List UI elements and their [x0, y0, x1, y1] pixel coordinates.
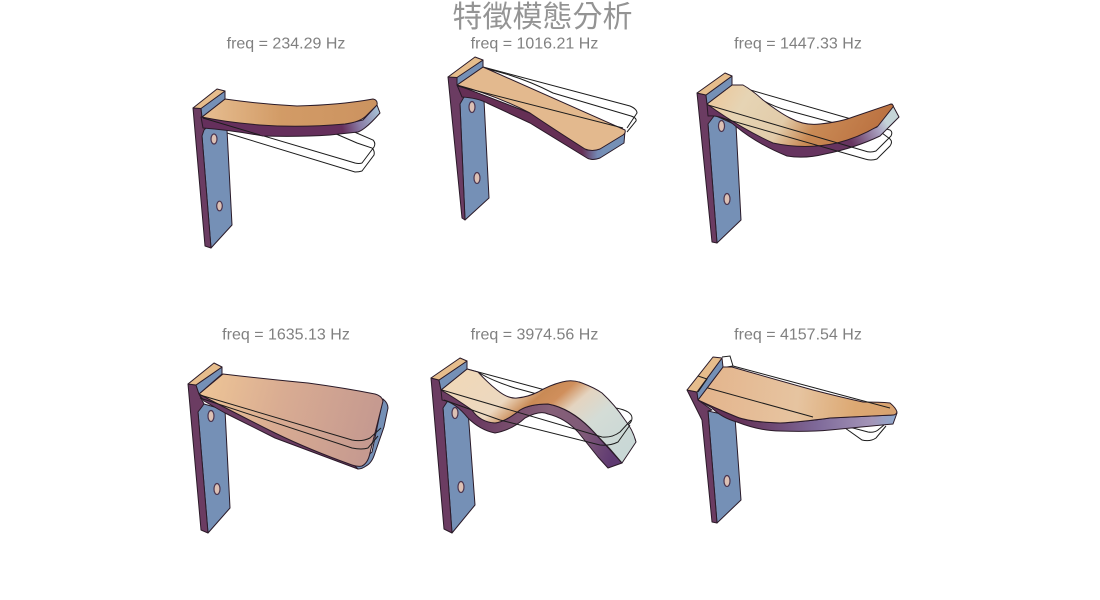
deflected plate top	[707, 85, 893, 146]
deflected plate top	[202, 99, 377, 126]
deflected plate edge	[457, 85, 625, 160]
label: freq 1635.13 Hz: freq = 1635.13 Hz	[222, 326, 350, 344]
wireframe across plate	[200, 395, 381, 449]
panel: mode 6 at 4157.54 Hz	[687, 326, 897, 523]
wireframe across plate	[708, 105, 865, 159]
deflected plate edge and end face	[199, 394, 388, 469]
bracket vertical leg	[431, 378, 475, 533]
mounting tab	[697, 73, 732, 104]
deflected plate edge	[441, 390, 622, 468]
panel: mode 3 at 1447.33 Hz	[697, 36, 899, 243]
wireframe across plate	[442, 390, 631, 445]
undeformed wireframe outline	[203, 118, 375, 172]
label: freq 3974.56 Hz: freq = 3974.56 Hz	[471, 326, 598, 344]
deflected plate edge	[201, 105, 380, 136]
deflected plate edge	[707, 104, 899, 157]
wireframe across plate	[458, 86, 623, 128]
deflected plate top	[457, 67, 625, 150]
label: freq 4157.54 Hz: freq = 4157.54 Hz	[734, 326, 862, 344]
undeformed wireframe outline	[483, 67, 637, 132]
bracket vertical leg	[188, 384, 230, 533]
undeformed wireframe outline	[733, 85, 892, 160]
mounting tab	[188, 363, 222, 394]
panel: mode 2 at 1016.21 Hz	[448, 36, 637, 220]
undeformed wireframe outline	[722, 356, 886, 441]
undeformed wireframe outline	[467, 369, 632, 425]
mounting tab	[687, 357, 723, 400]
wireframe over plate root	[203, 118, 260, 135]
panel: mode 5 at 3974.56 Hz	[431, 326, 636, 533]
deflected plate top	[698, 367, 897, 423]
title: 特徵模態分析	[452, 1, 632, 34]
deflected plate edge	[698, 400, 897, 431]
bracket vertical leg	[448, 77, 489, 220]
label: freq 1016.21 Hz: freq = 1016.21 Hz	[471, 36, 598, 52]
bracket vertical leg	[687, 390, 741, 523]
wireframe across plate	[697, 385, 890, 417]
mounting tab	[193, 89, 225, 117]
label: freq 1447.33 Hz: freq = 1447.33 Hz	[734, 36, 862, 52]
mounting tab	[448, 57, 483, 85]
mounting tab	[431, 358, 467, 390]
panel: mode 4 at 1635.13 Hz	[188, 326, 388, 533]
panel: mode 1 at 234.29 Hz	[193, 36, 380, 248]
deflected plate top	[441, 369, 636, 463]
deflected plate top	[199, 374, 383, 466]
bracket vertical leg	[697, 93, 741, 243]
label: freq 234.29 Hz: freq = 234.29 Hz	[227, 36, 345, 52]
bracket vertical leg	[193, 108, 232, 248]
